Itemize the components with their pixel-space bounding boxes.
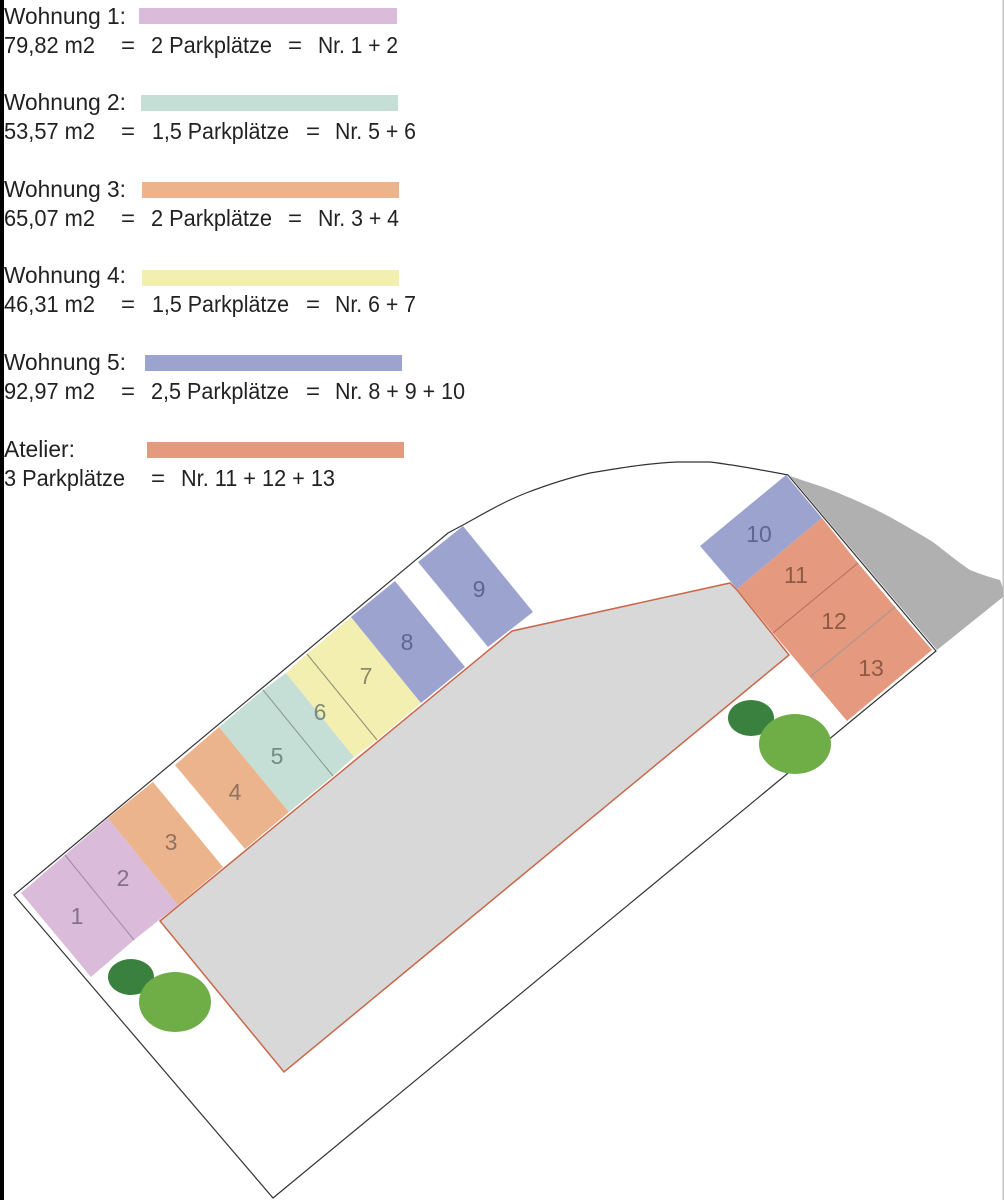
legend: Wohnung 2: Wohnung 2: xyxy=(4,89,126,115)
parking space 2 xyxy=(65,818,178,940)
parking space 11 xyxy=(737,518,858,633)
legend: Atelier: 3 Parkplätze xyxy=(4,465,125,491)
legend: Wohnung 4: = xyxy=(306,291,320,317)
parking space 8: 8 xyxy=(401,629,413,655)
legend: Wohnung 3: = xyxy=(288,205,302,231)
legend: Wohnung 3 xyxy=(4,176,399,231)
parking space 13: 13 xyxy=(858,655,884,681)
tree group: left xyxy=(108,959,211,1032)
legend: Wohnung 4: 1,5 Parkplätze xyxy=(152,291,289,317)
tree group: right xyxy=(728,700,831,774)
legend: Wohnung 3: = xyxy=(121,205,135,231)
parking space 9 xyxy=(418,526,533,647)
legend: Wohnung 5: = xyxy=(121,378,135,404)
legend: Wohnung 4: = xyxy=(121,291,135,317)
legend: Atelier: = xyxy=(151,465,165,491)
legend: Wohnung 2 xyxy=(4,89,416,144)
parking space 8 xyxy=(351,581,465,703)
parking space 1: 1 xyxy=(71,903,83,929)
legend: Wohnung 2: = xyxy=(121,118,135,144)
parking space 7: 7 xyxy=(360,663,372,689)
parking space 6 xyxy=(263,654,377,776)
parking space 11: 11 xyxy=(784,562,808,588)
legend: Wohnung 2: Nr. 5 + 6 xyxy=(335,118,416,144)
grey slope area xyxy=(790,476,1003,650)
legend: Wohnung 1: = xyxy=(121,32,135,58)
parking space 5 xyxy=(219,690,333,812)
legend: Wohnung 2: 53,57 m2 xyxy=(4,118,95,144)
legend: Atelier xyxy=(4,436,404,491)
legend: Wohnung 2: 1,5 Parkplätze xyxy=(152,118,289,144)
legend: Wohnung 5: 92,97 m2 xyxy=(4,378,95,404)
parking space 2: 2 xyxy=(117,865,129,891)
legend: Wohnung 1: 79,82 m2 xyxy=(4,32,95,58)
legend: Wohnung 3: Wohnung 3: xyxy=(4,176,126,202)
legend: Atelier: Nr. 11 + 12 + 13 xyxy=(181,465,335,491)
parking space 12: 12 xyxy=(821,608,847,634)
legend: Wohnung 4: 46,31 m2 xyxy=(4,291,95,317)
legend: Wohnung 3: 2 Parkplätze xyxy=(151,205,272,231)
parking space 9: 9 xyxy=(473,576,485,602)
legend: Wohnung 1: Nr. 1 + 2 xyxy=(318,32,398,58)
legend: Wohnung 5: Wohnung 5: xyxy=(4,349,126,375)
parking space 4: 4 xyxy=(229,779,242,805)
legend: Atelier: Atelier: xyxy=(4,436,75,462)
central grey building area xyxy=(160,583,789,1072)
legend: Wohnung 5: = xyxy=(306,378,320,404)
parking space 10 xyxy=(700,475,822,589)
legend: Wohnung 1: Wohnung 1: xyxy=(4,3,126,29)
legend: Wohnung 5: 2,5 Parkplätze xyxy=(151,378,289,404)
legend: Wohnung 5 xyxy=(4,349,465,404)
left black edge bar xyxy=(0,0,4,1200)
parking space 4 xyxy=(175,727,289,849)
parking space 5: 5 xyxy=(271,743,283,769)
legend: Wohnung 3: 65,07 m2 xyxy=(4,205,95,231)
parking space 12 xyxy=(773,563,895,677)
legend: Wohnung 1: = xyxy=(288,32,302,58)
parking space 10: 10 xyxy=(746,521,772,547)
property boundary xyxy=(14,462,936,1198)
legend: Wohnung 2: = xyxy=(306,118,320,144)
parking space 13 xyxy=(810,607,932,721)
parking space 3: 3 xyxy=(165,829,177,855)
legend: Wohnung 1: 2 Parkplätze xyxy=(151,32,272,58)
legend: Wohnung 4: Wohnung 4: xyxy=(4,262,126,288)
legend: Wohnung 5: Nr. 8 + 9 + 10 xyxy=(335,378,465,404)
parking space 3 xyxy=(108,782,223,905)
parking space 7 xyxy=(307,617,421,740)
legend: Wohnung 4 xyxy=(4,262,416,317)
legend: Wohnung 1 xyxy=(4,3,398,58)
parking space 6: 6 xyxy=(314,699,326,725)
legend: Wohnung 4: Nr. 6 + 7 xyxy=(335,291,416,317)
parking space 1 xyxy=(21,855,134,977)
legend: Wohnung 3: Nr. 3 + 4 xyxy=(318,205,399,231)
site plan xyxy=(14,462,1003,1198)
